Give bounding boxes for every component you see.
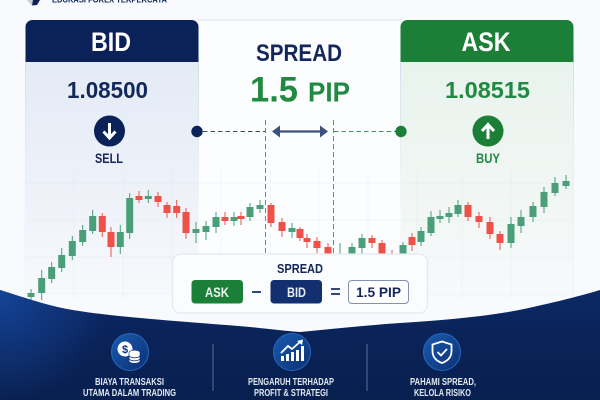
bid pill <box>270 280 322 304</box>
formula heading: SPREAD <box>277 262 323 276</box>
bid heading: BID <box>91 27 131 57</box>
caption: UTAMA DALAM TRADING <box>83 387 176 399</box>
ask price: 1.08515 <box>445 77 530 103</box>
panel: spread background <box>198 20 401 254</box>
spread heading: SPREAD <box>256 40 342 67</box>
candlestick chart <box>31 175 566 300</box>
icon: buy arrow <box>472 116 504 146</box>
result box <box>348 280 408 304</box>
ask pill: ASK <box>205 284 229 300</box>
footer item: profit impact <box>248 334 334 399</box>
chart grid <box>25 170 573 300</box>
dark footer wave <box>0 290 600 400</box>
caption: PAHAMI SPREAD, <box>410 376 476 388</box>
caption: PROFIT & STRATEGI <box>254 387 328 399</box>
ask heading: ASK <box>462 27 511 57</box>
footer item: manage risk <box>410 334 476 399</box>
sell label: SELL <box>95 151 123 166</box>
logo <box>27 0 167 6</box>
bid header <box>26 20 198 62</box>
minus sign <box>252 291 261 293</box>
spread connector: dashes <box>203 120 396 254</box>
ask dot <box>395 126 407 137</box>
divider <box>366 344 368 391</box>
icon: shield <box>424 334 460 370</box>
bid dot <box>191 126 203 137</box>
double arrow <box>272 126 328 138</box>
bid pill: BID <box>287 284 306 300</box>
caption: PENGARUH TERHADAP <box>248 376 334 388</box>
icon: coins: $ <box>122 344 128 356</box>
panel: ask <box>400 20 574 300</box>
ask pill <box>192 280 243 304</box>
divider <box>212 344 214 391</box>
spread value: PIP <box>308 76 350 108</box>
formula card <box>172 254 428 313</box>
buy label: BUY <box>476 151 500 166</box>
equals sign <box>331 289 340 294</box>
icon: growth chart <box>274 334 310 370</box>
spread value: 1.5 <box>250 70 298 110</box>
result box: 1.5 PIP <box>356 284 401 300</box>
icon: sell arrow <box>94 116 125 146</box>
bid price: 1.08500 <box>67 77 148 103</box>
spread value <box>250 70 350 110</box>
caption: BIAYA TRANSAKSI <box>95 376 164 388</box>
footer item: transaction cost <box>83 334 176 399</box>
caption: KELOLA RISIKO <box>414 387 471 399</box>
panel: bid <box>26 20 198 300</box>
ask header <box>400 20 574 62</box>
